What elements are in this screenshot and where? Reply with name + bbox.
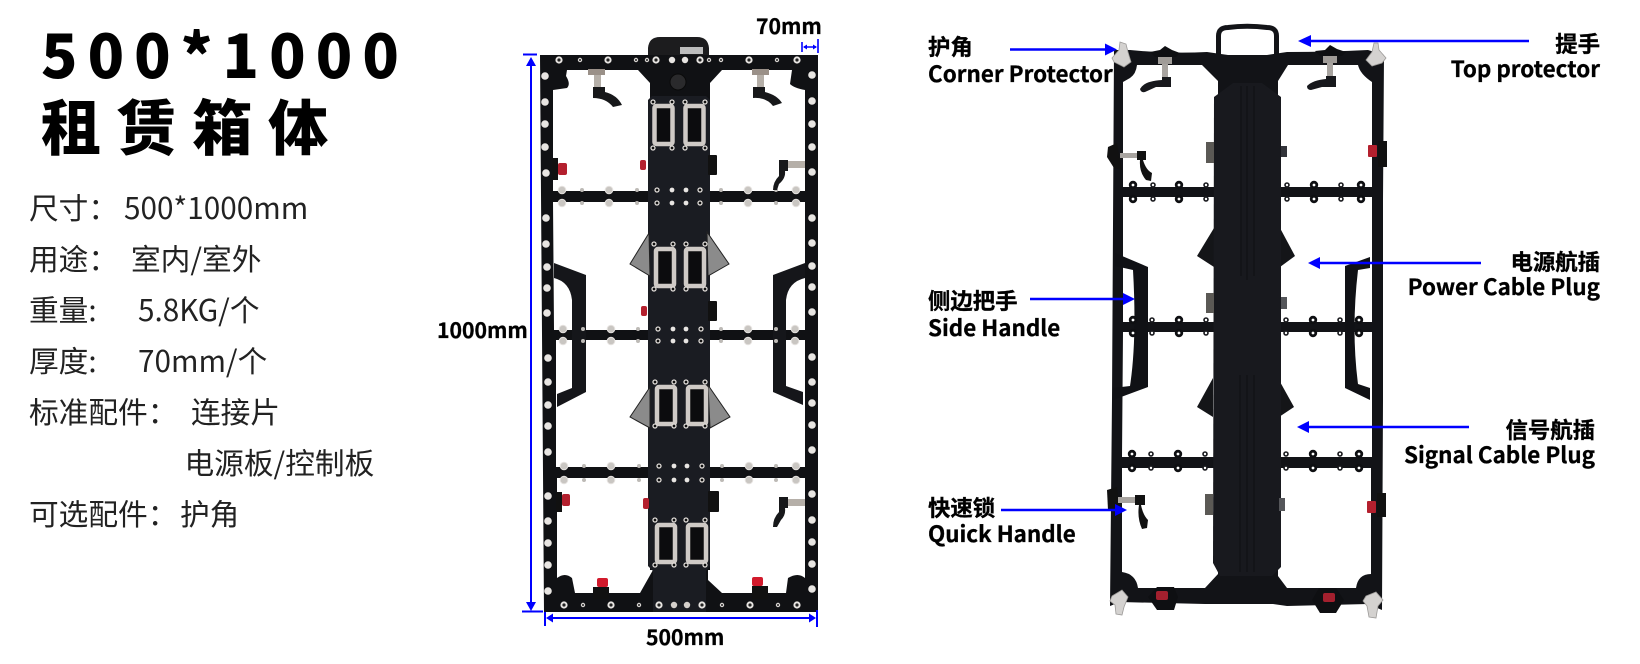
specification list: 电源板/控制板 — [184, 440, 374, 483]
carry handle, back view — [1218, 26, 1276, 56]
cover grooves — [1240, 86, 1254, 572]
callout: top protector — [1298, 27, 1600, 84]
connectors on cover — [1205, 142, 1287, 515]
side handles, front view — [554, 263, 805, 407]
callout: corner protector: 护角 — [928, 30, 973, 62]
wings, back view — [1197, 228, 1295, 417]
specification list — [29, 185, 374, 534]
dark side clips — [552, 155, 768, 599]
specification list: 可选配件： — [29, 491, 177, 534]
callout: corner protector — [928, 30, 1117, 89]
callout: corner protector: Corner Protector — [928, 57, 1113, 89]
specification list: 连接片 — [191, 389, 280, 432]
title: 租赁箱体 — [41, 81, 344, 168]
callout: top protector: Top protector — [1451, 52, 1600, 84]
connector frame screws — [651, 100, 707, 567]
cover plate, back view — [1213, 83, 1281, 576]
callout: signal cable plug: Signal Cable Plug — [1404, 438, 1595, 470]
dimension 500mm arrow — [545, 610, 817, 652]
specification list: 标准配件： — [29, 389, 177, 432]
callout: power cable plug: 电源航插 — [1510, 245, 1600, 277]
specification list: 室内/室外 — [131, 236, 261, 279]
center lock disc — [670, 74, 686, 90]
callout: quick handle — [928, 491, 1127, 549]
ring bolts on crossbars, back view — [1129, 182, 1364, 471]
ring bolts on top and bottom bars — [556, 57, 800, 608]
callout: signal cable plug: 信号航插 — [1505, 413, 1595, 445]
specification list: 厚度: — [29, 338, 97, 381]
red knobs — [558, 160, 763, 587]
back view of cabinet — [1107, 26, 1387, 618]
dimension 70mm arrow: 70mm — [756, 10, 822, 41]
title: 500*1000 — [41, 9, 409, 96]
frame, back view — [1110, 50, 1384, 610]
callout: side handle: Side Handle — [928, 311, 1060, 343]
white frame bolts — [541, 57, 816, 595]
specification list: 用途： — [29, 236, 118, 279]
dimension 500mm arrow: 500mm — [646, 621, 724, 652]
gray wings — [630, 232, 730, 428]
quick locks, back view — [1107, 45, 1346, 529]
specification list: 尺寸： — [29, 185, 118, 228]
specification list: 500*1000mm — [124, 185, 308, 228]
callout: signal cable plug — [1297, 413, 1595, 470]
specification list: 重量: — [29, 287, 97, 330]
callout: side handle — [928, 284, 1135, 343]
metal connector frames — [654, 106, 706, 562]
specification list: 护角 — [180, 491, 239, 534]
side handles, back view — [1113, 253, 1370, 400]
quick locks, front view — [588, 69, 805, 527]
specification list: 5.8KG/个 — [138, 287, 260, 330]
top handle, front view — [648, 37, 709, 56]
red clamps, back view — [1148, 141, 1387, 613]
corner protectors — [1110, 42, 1386, 618]
callout: power cable plug — [1308, 245, 1600, 302]
dimension 1000mm arrow — [437, 54, 543, 612]
center plate, front view — [648, 96, 710, 612]
callout: quick handle: 快速锁 — [928, 491, 995, 523]
front view of cabinet — [540, 37, 818, 612]
dimension 1000mm arrow: 1000mm — [437, 314, 528, 345]
callout: side handle: 侧边把手 — [928, 284, 1018, 316]
title — [41, 9, 409, 168]
specification list: 70mm/个 — [138, 338, 267, 381]
callout: power cable plug: Power Cable Plug — [1408, 270, 1600, 302]
outer frame, front view — [540, 55, 818, 612]
crossbar washers — [558, 186, 800, 484]
callout: quick handle: Quick Handle — [928, 517, 1076, 549]
callout: top protector: 提手 — [1555, 27, 1600, 59]
